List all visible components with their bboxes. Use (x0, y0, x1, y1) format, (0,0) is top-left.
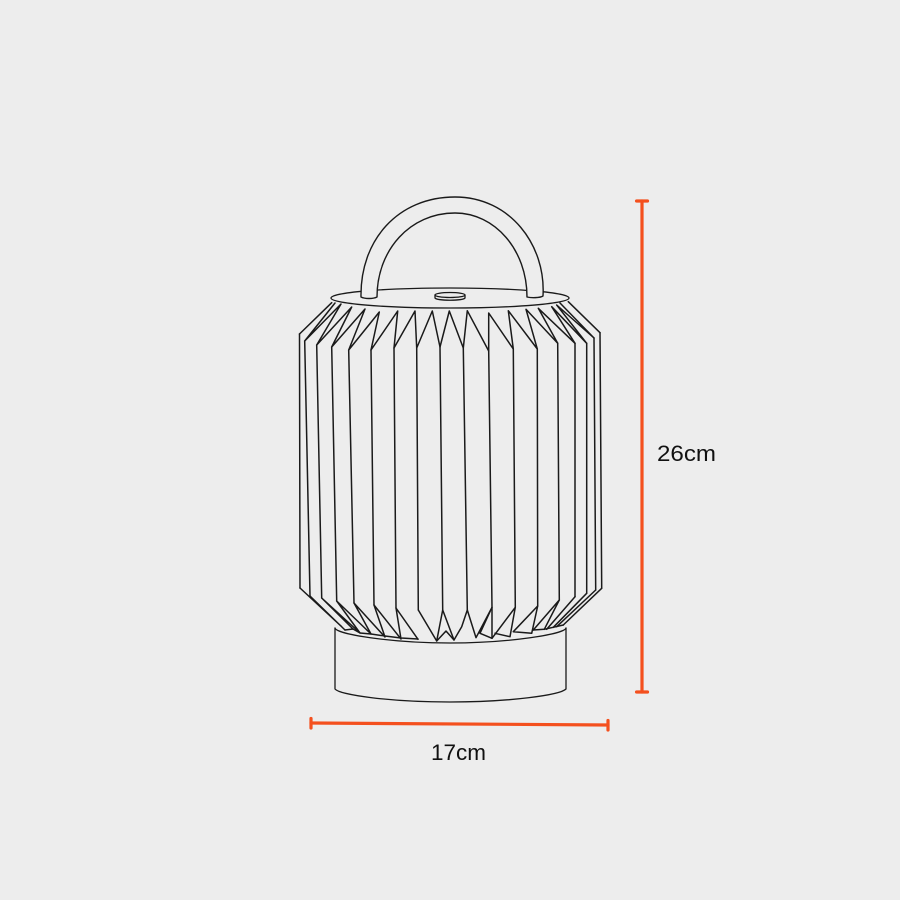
bottom notch outline (345, 625, 563, 641)
top disc (331, 288, 569, 308)
button (435, 292, 465, 300)
pleated shade (300, 302, 602, 641)
handle (361, 197, 543, 298)
width label: 17cm (431, 740, 486, 765)
vertical pleats (300, 333, 602, 638)
top folds (300, 302, 600, 351)
lantern base (335, 628, 566, 702)
width dimension line (311, 718, 608, 730)
lantern line drawing (300, 197, 602, 702)
bottom folds (300, 588, 602, 641)
height dimension line (636, 201, 648, 692)
height label: 26cm (657, 441, 716, 466)
